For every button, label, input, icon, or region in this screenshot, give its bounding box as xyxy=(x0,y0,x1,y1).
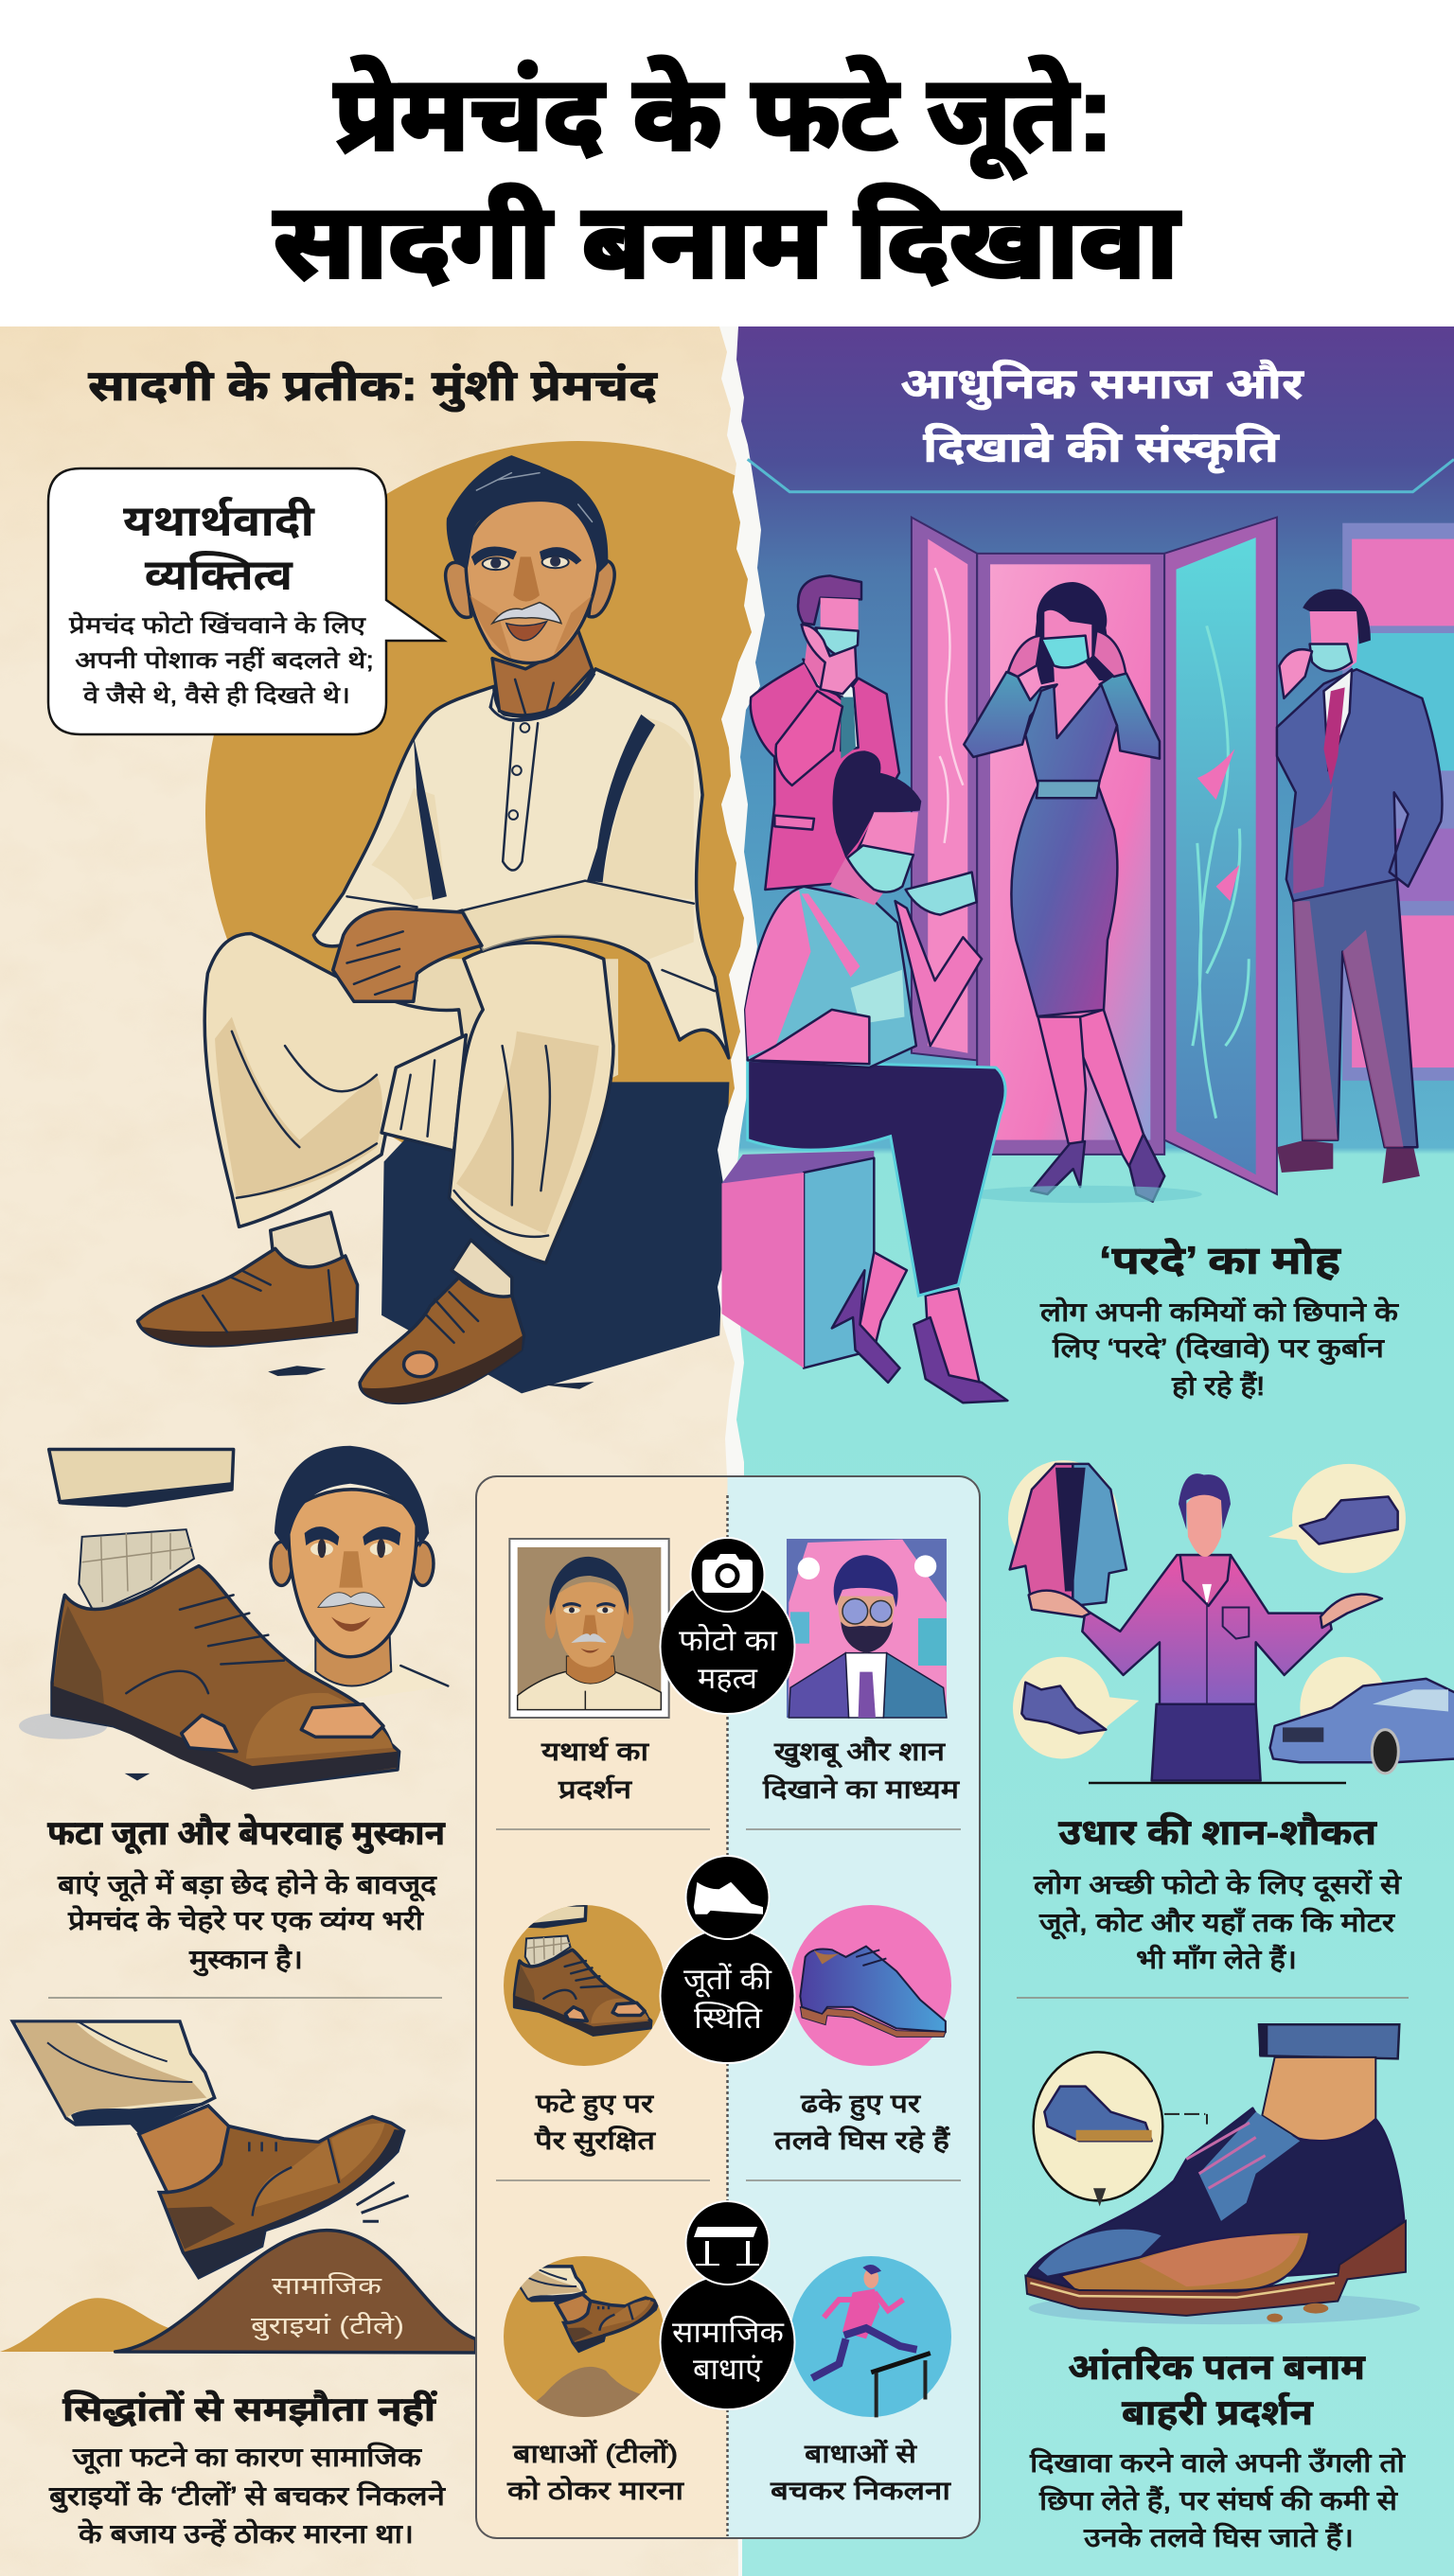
badge: photo importance xyxy=(661,1579,795,1714)
text block: no compromise: जूता फटने का कारण सामाजिक xyxy=(73,2442,422,2474)
kurta folds xyxy=(414,715,655,900)
labels: row 1: दिखाने का माध्यम xyxy=(763,1774,960,1804)
folding screen right panel xyxy=(1164,518,1277,1194)
title xyxy=(274,55,1180,300)
text block: torn shoe: बाएं जूते में बड़ा छेद होने के बावजूद xyxy=(58,1869,437,1901)
text block: परदे का मोह xyxy=(1040,1238,1399,1401)
labels: row 1: प्रदर्शन xyxy=(559,1774,632,1804)
text block: no compromise: बुराइयों के ‘टीलों’ से बचकर निकलने xyxy=(49,2480,446,2513)
motion lines xyxy=(357,2182,409,2221)
kurta xyxy=(313,669,729,1058)
labels: row 3: बाधाओं (टीलों) xyxy=(513,2439,678,2468)
portrait face xyxy=(271,1446,448,1701)
text block: inner decay: उनके तलवे घिस जाते हैं। xyxy=(1084,2522,1354,2552)
circle: polished shoe thumbnail xyxy=(790,1905,951,2066)
dark box seat xyxy=(268,1082,729,1393)
placket xyxy=(503,723,538,871)
right sock xyxy=(452,1240,512,1300)
debris xyxy=(1267,2303,1328,2322)
illustration: polished shoe with worn sole xyxy=(1025,2024,1420,2324)
bubble heading: व्यक्तित्व xyxy=(144,550,293,599)
torn shoe xyxy=(49,1450,399,1790)
ceiling xyxy=(748,459,1454,492)
title: प्रेमचंद के फटे जूते: xyxy=(334,55,1113,180)
mound label xyxy=(251,2271,404,2340)
text block: परदे का मोह: लिए ‘परदे’ (दिखावे) पर कुर्बान xyxy=(1053,1332,1385,1365)
labels: row 2: फटे हुए पर xyxy=(536,2089,654,2121)
hand xyxy=(333,909,482,1001)
badge: shoe condition: जूतों की xyxy=(683,1963,772,1998)
sock xyxy=(79,1529,194,1614)
circle: torn shoe thumbnail xyxy=(504,1905,665,2066)
woman adjusting mask xyxy=(964,582,1160,1016)
badge: social obstacles: बाधाएं xyxy=(693,2353,763,2386)
pant leg xyxy=(12,2021,215,2125)
small hill xyxy=(0,2298,180,2352)
text block: borrowed grandeur: लोग अच्छी फोटो के लिए दूसरों से xyxy=(1034,1869,1402,1902)
labels: row 2: ढके हुए पर xyxy=(801,2089,921,2121)
text block: torn shoe xyxy=(47,1812,446,1976)
dhoti filler xyxy=(386,959,618,1155)
ankle xyxy=(1262,2057,1375,2160)
thought blobs xyxy=(1008,1460,1406,1758)
text block: borrowed grandeur xyxy=(1034,1811,1402,1974)
illustration: seated woman head xyxy=(830,750,977,915)
text block: inner decay: बाहरी प्रदर्शन xyxy=(1122,2391,1314,2433)
mound label: सामाजिक xyxy=(272,2271,382,2300)
neck xyxy=(492,630,593,715)
badge: social obstacles xyxy=(661,2275,795,2409)
car xyxy=(1270,1679,1454,1773)
illustration: kicking the mound xyxy=(0,2021,476,2353)
badge: shoe condition xyxy=(661,1929,795,2063)
labels: row 2: तलवे घिस रहे हैं xyxy=(774,2126,950,2155)
circle: kick thumbnail xyxy=(504,2256,665,2419)
text block: torn shoe: मुस्कान है। xyxy=(189,1944,303,1976)
man in suit xyxy=(1277,590,1442,1183)
badge: hurdle icon xyxy=(685,2201,769,2285)
shoes props xyxy=(1021,1497,1398,1734)
badge: photo importance: महत्व xyxy=(698,1662,758,1695)
text block: परदे का मोह: हो रहे हैं! xyxy=(1172,1370,1265,1401)
bubble body: वे जैसे थे, वैसे ही दिखते थे। xyxy=(83,680,350,709)
text block: inner decay: छिपा लेते हैं, पर संघर्ष की कमी से xyxy=(1039,2485,1398,2515)
panel: right modern-society background with torn edge xyxy=(718,326,1454,2576)
illustration: Premchand legs xyxy=(137,934,618,1403)
illustration: room and folding screen xyxy=(748,459,1454,1202)
illustration: borrowed grandeur xyxy=(1008,1460,1454,1781)
worn sole with foot xyxy=(1060,2232,1309,2294)
ears xyxy=(446,562,471,617)
folding screen frame left xyxy=(912,518,977,1060)
ankle xyxy=(139,2106,229,2193)
text block: परदे का मोह: लोग अपनी कमियों को छिपाने के xyxy=(1040,1297,1399,1327)
callout: speech bubble xyxy=(48,468,444,734)
hair xyxy=(447,455,608,574)
shadow xyxy=(1029,2292,1420,2324)
inset bubble xyxy=(1034,2052,1207,2207)
bubble body: प्रेमचंद फोटो खिंचवाने के लिए xyxy=(69,610,366,639)
shoe upper xyxy=(1027,2108,1404,2290)
eyes xyxy=(483,558,509,570)
trouser hem xyxy=(1259,2024,1399,2058)
folding screen centre mirror xyxy=(977,554,1164,1155)
panel: centre comparison xyxy=(476,1476,980,2538)
labels: row 1: खुशबू और शान xyxy=(774,1738,946,1768)
badge: social obstacles: सामाजिक xyxy=(672,2316,785,2349)
photo: stylish man xyxy=(787,1539,947,1718)
mustard circle behind figure xyxy=(205,441,951,1187)
text block: परदे का मोह: ‘परदे’ का मोह xyxy=(1099,1238,1341,1282)
man in pink jacket xyxy=(751,575,899,890)
moustache xyxy=(492,602,561,624)
face xyxy=(466,497,599,663)
illustration: man in pink jacket and woman with mask xyxy=(751,575,1160,1016)
social evils mound xyxy=(115,2231,476,2353)
badge: shoe icon xyxy=(685,1856,769,1939)
labels: row 3: को ठोकर मारना xyxy=(507,2477,684,2505)
labels: row 3: बचकर निकलना xyxy=(771,2477,951,2505)
bubble heading: यथार्थवादी xyxy=(123,496,316,545)
text block: inner decay xyxy=(1030,2346,1406,2552)
left sock xyxy=(271,1212,343,1274)
shoe shadow xyxy=(19,1713,107,1739)
heading: right column: आधुनिक समाज और xyxy=(900,359,1304,410)
text block: inner decay: दिखावा करने वाले अपनी उँगली तो xyxy=(1030,2447,1406,2478)
kicking shoe xyxy=(159,2117,404,2278)
heading: right column xyxy=(900,359,1304,474)
text block: inner decay: आंतरिक पतन बनाम xyxy=(1068,2346,1366,2388)
text block: borrowed grandeur: भी माँग लेते हैं। xyxy=(1136,1944,1297,1974)
labels: row 1 xyxy=(541,1737,960,1804)
text block: borrowed grandeur: उधार की शान-शौकत xyxy=(1058,1811,1378,1853)
circle: hurdler thumbnail xyxy=(790,2256,951,2417)
text block: torn shoe: प्रेमचंद के चेहरे पर एक व्यंग्य भरी xyxy=(68,1905,424,1935)
window panes xyxy=(1342,523,1454,1081)
illustration: torn shoe and smiling face xyxy=(19,1446,448,1790)
pants left leg xyxy=(204,934,464,1226)
text block: no compromise: के बजाय उन्हें ठोकर मारना था। xyxy=(79,2518,414,2549)
text block: no compromise: सिद्धांतों से समझौता नहीं xyxy=(62,2389,438,2428)
photo: Premchand portrait xyxy=(509,1539,669,1718)
text block: no compromise xyxy=(49,2389,446,2549)
bubble body xyxy=(69,610,374,709)
mound label: बुराइयां (टीले) xyxy=(251,2311,404,2340)
seated woman body xyxy=(721,887,1007,1403)
badge: shoe condition: स्थिति xyxy=(694,2002,763,2035)
illustration: Premchand upper body and head xyxy=(313,455,729,1058)
eyebrows xyxy=(471,547,581,566)
panel: parchment background xyxy=(0,326,786,2576)
illustration: man in suit, seated woman body xyxy=(721,590,1442,1403)
pants centre fold xyxy=(381,1035,466,1151)
left shoe xyxy=(137,1248,358,1346)
heading: left column: सादगी के प्रतीक: मुंशी प्रेमचंद xyxy=(88,360,658,412)
labels: row 3: बाधाओं से xyxy=(805,2439,917,2468)
floor shadow xyxy=(967,1186,1202,1203)
pants right leg xyxy=(449,943,613,1263)
jacket xyxy=(1010,1464,1126,1606)
heading: right column: दिखावे की संस्कृति xyxy=(923,421,1281,474)
text block: torn shoe: फटा जूता और बेपरवाह मुस्कान xyxy=(47,1812,446,1854)
mouth xyxy=(506,622,546,641)
man xyxy=(1029,1473,1382,1781)
holes in shoe xyxy=(301,1704,383,1737)
nose xyxy=(513,556,540,602)
woman's legs and heels xyxy=(1031,1010,1164,1202)
bubble heading xyxy=(123,496,316,599)
right shoe with hole xyxy=(360,1278,524,1403)
badge: photo importance: फोटो का xyxy=(679,1624,778,1657)
labels: row 2 xyxy=(535,2089,950,2157)
cheek shading xyxy=(470,595,593,659)
title: सादगी बनाम दिखावा xyxy=(274,184,1180,300)
labels: row 2: पैर सुरक्षित xyxy=(535,2126,656,2157)
text block: borrowed grandeur: जूते, कोट और यहाँ तक कि मोटर xyxy=(1039,1907,1395,1939)
badge: camera icon xyxy=(691,1538,765,1612)
bubble body: अपनी पोशाक नहीं बदलते थे; xyxy=(75,645,374,674)
labels: row 3 xyxy=(507,2439,951,2505)
labels: row 1: यथार्थ का xyxy=(541,1737,649,1766)
shoe body xyxy=(52,1566,399,1788)
pant cuff xyxy=(49,1450,234,1506)
